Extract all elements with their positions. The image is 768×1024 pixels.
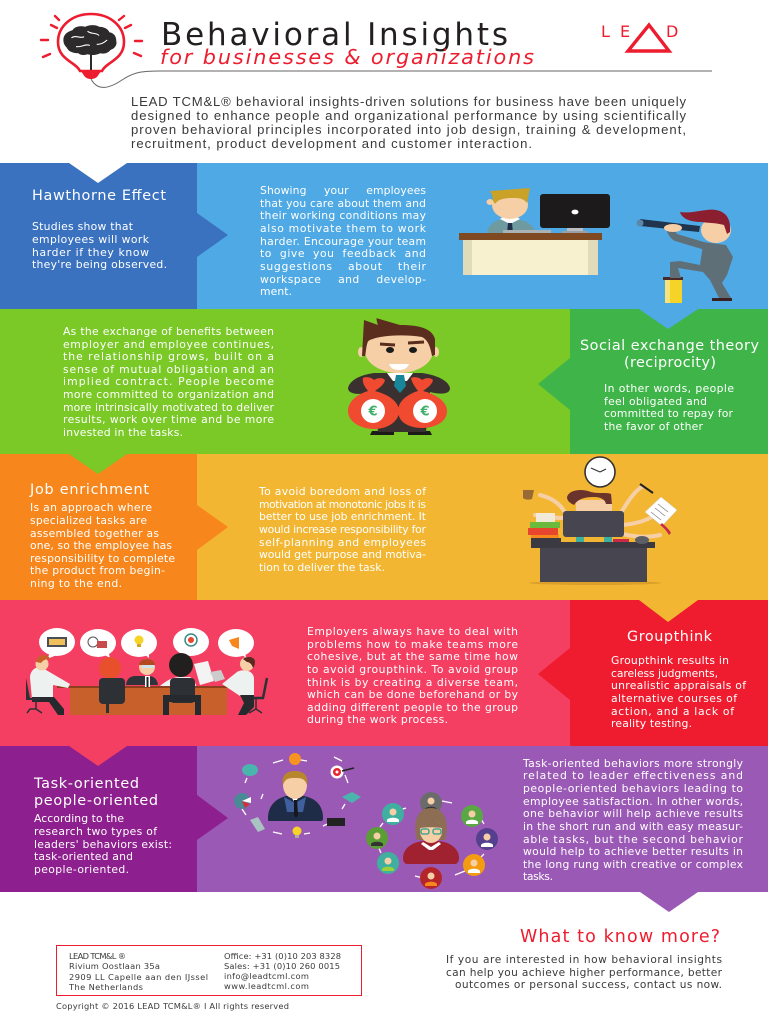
heading: Social exchange theory: Social exchange theory [580,338,759,354]
heading: Groupthink: Groupthink [627,629,713,645]
text: job enrichment detail: tion to deliver the task. [259,561,385,574]
text: task-oriented detail: one behavior will help achieve results [523,807,743,820]
heading: Hawthorne Effect: Hawthorne Effect [32,188,166,204]
text: groupthink summary: Groupthink results in [611,654,729,667]
address: 2909 LL Capelle aan den IJssel [69,972,208,982]
text: social exchange detail: more intrinsically motivated to deliver [63,401,275,414]
illustration: task-oriented leader with icons [234,753,361,838]
text: social exchange summary: the favor of other [604,420,704,433]
panel: Social exchange theory [0,309,768,454]
text: contact invitation: can help you achieve higher performance, better [446,967,723,979]
panel: Hawthorne Effect [0,163,768,309]
text: task-oriented detail: people-oriented behaviors leading to [523,782,743,795]
text: Hawthorne detail: ment. [260,285,292,298]
text: task-oriented summary: people-oriented. [34,863,129,876]
text: Hawthorne detail: their working conditions may [260,209,427,222]
text: social exchange summary: committed to repay for [604,407,734,420]
text: job enrichment summary: the product from begin- [30,564,165,577]
text: task-oriented summary: leaders' behaviors exist: [34,838,172,851]
illustration: team meeting [26,628,267,715]
text: Hawthorne summary: employees will work [32,233,150,246]
phone and web: info@leadtcml.com [224,971,309,981]
header rule with wire [91,71,712,87]
text: job enrichment summary: responsibility to complete [30,552,175,565]
address: Rivium Oostlaan 35a [69,961,160,971]
logo: LEAD: L [601,22,610,41]
text: Hawthorne detail: Showing your employees [260,184,426,197]
text: job enrichment summary: one, so the employee has [30,539,172,552]
illustration: man at desk [459,188,602,275]
illustration: businessman with money bags [348,318,450,435]
text: groupthink summary: careless judgments, [611,667,718,680]
text: groupthink detail: during the work process. [307,713,448,726]
text: job enrichment summary: Is an approach where [30,501,152,514]
panel: Task-oriented people-oriented [0,746,768,912]
text: groupthink detail: Employers always have to deal with [307,625,518,638]
intro paragraph: recruitment, product development and customer interaction. [131,136,532,151]
illustration: multitasking worker at desk [523,457,677,585]
text: social exchange detail: implied contract. People become [63,375,274,388]
address [68,951,208,992]
text: Hawthorne summary: harder if they know [32,246,149,259]
text: social exchange detail: the relationship grows, built on a [63,350,274,363]
text: groupthink summary: alternative courses of [611,692,737,705]
text: groupthink detail: adding different people to the group [307,701,518,714]
text: task-oriented detail: tasks. [523,870,553,883]
heading: Task-oriented people-oriented [33,776,158,809]
intro paragraph: proven behavioral principles incorporated into job design, training & development, [131,122,686,137]
text: job enrichment detail: better to use job enrichment. It [259,510,426,523]
text: job enrichment detail: would increase responsibility for [259,523,427,536]
text: groupthink summary: action, and a lack of [611,705,734,718]
text: job enrichment summary: ning to the end. [30,577,122,590]
illustration: computer monitor [540,194,610,233]
text: task-oriented summary [34,812,172,876]
text: task-oriented summary: task-oriented and [34,850,133,863]
heading: Social exchange theory: (reciprocity) [624,355,716,371]
text: social exchange detail [63,325,275,439]
text: Hawthorne detail: workspace and develop- [260,273,426,286]
text: task-oriented detail [522,757,744,883]
text: Hawthorne detail [260,184,427,298]
text: task-oriented detail: employee satisfaction. In other words, [523,795,743,808]
speech bubbles [39,628,254,659]
text: groupthink detail: cohesive, but at the same time how [307,650,518,663]
text: groupthink detail [307,625,519,726]
meeting table [57,686,240,688]
text: Hawthorne detail: suggestions about their [260,260,427,273]
panel: Job enrichment [0,454,768,600]
illustration: man with telescope [636,210,733,303]
text: contact invitation [446,954,723,991]
text: task-oriented summary: research two types of [34,825,157,838]
illustration: businessman with money bags: € [419,404,430,420]
text: Hawthorne detail: also motivate them to work [260,222,427,235]
text: social exchange detail: sense of mutual obligation and an [63,363,274,376]
intro paragraph [131,94,686,151]
address: The Netherlands [68,982,143,992]
text: social exchange detail: As the exchange of benefits between [63,325,274,338]
text: groupthink summary [611,654,746,730]
copyright: Copyright © 2016 LEAD TCM&L® I All rights reserved [56,1001,289,1011]
phone and web: Office: +31 (0)10 203 8328 [224,951,341,961]
text: task-oriented summary: According to the [34,812,124,825]
text: groupthink detail: problems how to make teams more [307,638,518,651]
heading: Social exchange theory [580,338,759,371]
text: social exchange detail: invested in the tasks. [63,426,183,439]
logo: LEAD [601,22,678,51]
contact box [56,946,362,996]
text: task-oriented detail: Task-oriented behaviors more strongly [522,757,744,770]
text: groupthink detail: think is by creating a diverse team, [307,676,518,689]
text: social exchange detail: employer and employee continues, [63,338,274,351]
logo: LEAD: E [620,22,630,41]
address: LEAD TCM&L ® [69,951,126,961]
text: groupthink summary: reality testing. [611,717,692,730]
text: social exchange summary: In other words, people [604,382,734,395]
text: groupthink detail: which can be done beforehand or by [307,688,519,701]
text: task-oriented detail: in the short run and with easy measur- [523,820,743,833]
text: Hawthorne detail: that you care about them and [260,197,426,210]
text: Hawthorne summary: Studies show that [32,220,133,233]
text: Hawthorne summary: they're being observed. [32,258,167,271]
text: groupthink summary: unrealistic appraisals of [611,679,746,692]
text: job enrichment detail: self-planning and employees [259,536,426,549]
text: job enrichment summary: specialized tasks are [30,514,147,527]
text: Hawthorne detail: harder. Encourage your team [260,235,426,248]
text: task-oriented detail: able tasks, but the second behavior [523,833,744,846]
text: contact invitation: If you are interested in how behavioral insights [446,954,722,966]
text: groupthink detail: to avoid groupthink. To avoid group [307,663,518,676]
text: task-oriented detail: the long rung with creative or complex [523,858,744,871]
logo: LEAD: D [666,22,678,41]
text: Hawthorne summary [32,220,167,271]
text: job enrichment detail: To avoid boredom and loss of [258,485,426,498]
subtitle: for businesses & organizations [160,45,534,69]
text: Hawthorne detail: to give you feedback and [260,247,426,260]
text: job enrichment detail [258,485,427,574]
people [30,667,70,699]
phone and web: www.leadtcml.com [224,981,309,991]
heading: Job enrichment: Job enrichment [29,482,149,498]
text: task-oriented detail: related to leader effectiveness and [523,769,743,782]
heading: Task-oriented people-oriented: Task-oriented [33,776,139,792]
phone and web [224,951,341,991]
intro paragraph: LEAD TCM&L® behavioral insights-driven solutions for business have been uniquely [131,94,686,109]
text: job enrichment summary: assembled together as [30,527,159,540]
text: job enrichment detail: would get purpose and motiva- [259,548,426,561]
intro paragraph: designed to enhance people and organizational performance by using scientifically [131,108,686,123]
text: social exchange detail: more committed to organization and [63,388,274,401]
text: job enrichment summary [30,501,175,590]
illustration: people-oriented leader with team [366,792,498,889]
illustration: businessman with money bags: € [367,404,378,420]
text: task-oriented detail: would help to achieve better results in [523,845,743,858]
heading: Task-oriented people-oriented: people-oriented [34,793,158,809]
panel: Groupthink [0,600,768,746]
text: job enrichment detail: motivation at monotonic jobs it is [259,498,426,511]
header icon: light bulb with brain [41,14,142,79]
heading: What to know more: What to know more? [520,927,720,947]
text: social exchange detail: results, work over time and be more [63,413,274,426]
text: social exchange summary: feel obligated and [604,395,707,408]
title: Behavioral Insights [161,17,508,53]
phone and web: Sales: +31 (0)10 260 0015 [224,961,340,971]
text: contact invitation: outcomes or personal success, contact us now. [455,979,722,991]
text: social exchange summary [604,382,734,433]
